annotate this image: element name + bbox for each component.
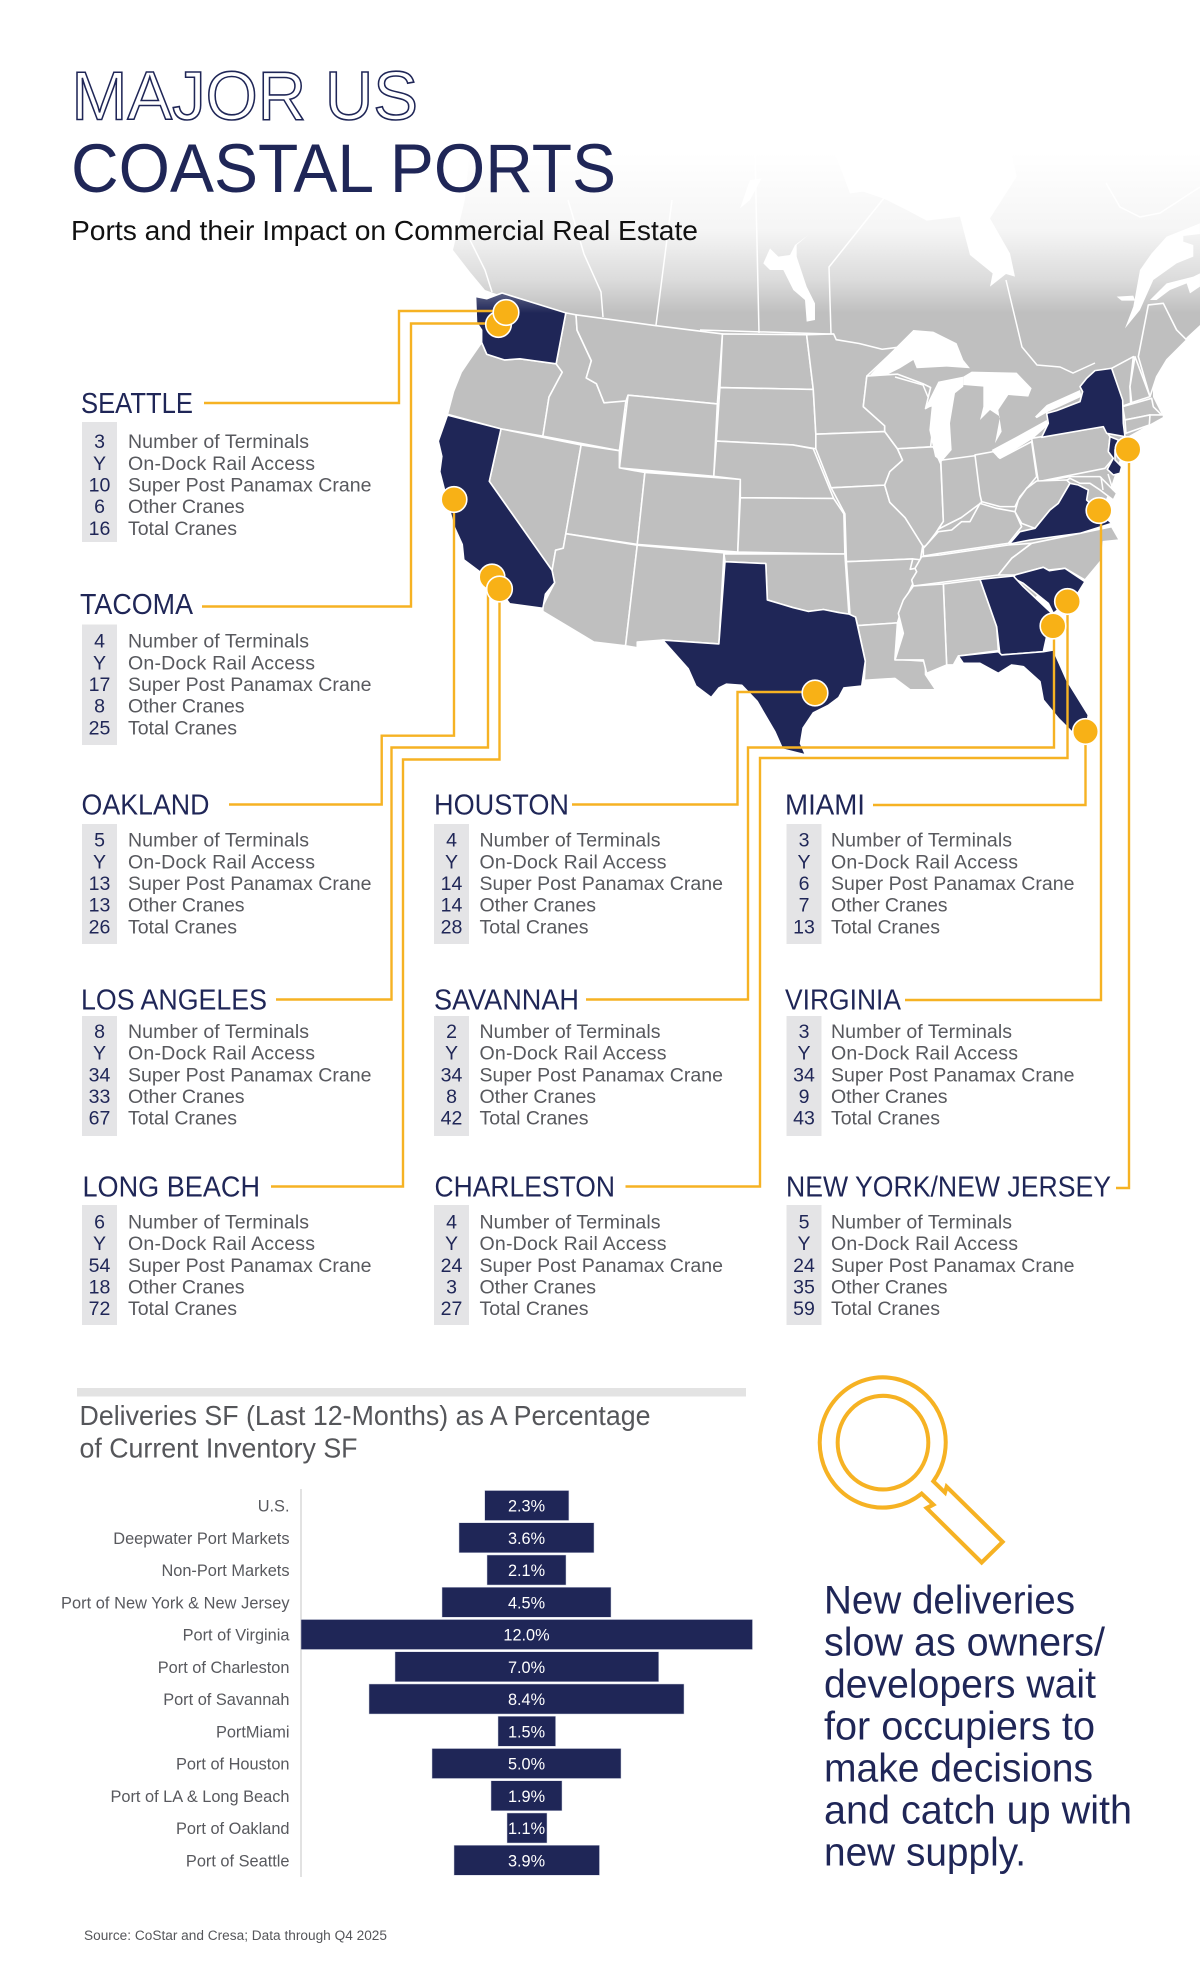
- table: Charleston: Other Cranes: [480, 1276, 596, 1298]
- table: Miami: 3: [799, 830, 809, 852]
- table: Oakland: On-Dock Rail Access: [128, 851, 315, 873]
- table: Miami: Number of Terminals: [831, 830, 1012, 852]
- state: California: [438, 415, 555, 608]
- title line: MAJOR US: MAJOR US: [72, 58, 418, 134]
- table: New York / New Jersey: Other Cranes: [831, 1276, 948, 1298]
- table: Miami: [786, 824, 1074, 944]
- map: Canada and base land: [453, 150, 1200, 640]
- bar chart: 1.5%: [508, 1723, 545, 1741]
- pin: Virginia: [1086, 498, 1112, 523]
- table: Houston: Total Cranes: [480, 916, 589, 938]
- table: Charleston: 24: [441, 1255, 462, 1277]
- table: Savannah: Super Post Panamax Crane: [480, 1064, 723, 1086]
- table: Miami: Total Cranes: [831, 916, 940, 938]
- title line: COASTAL PORTS: COASTAL PORTS: [71, 130, 616, 207]
- table: Savannah: On-Dock Rail Access: [480, 1043, 667, 1065]
- table: Long Beach: 6: [94, 1212, 105, 1234]
- table: New York / New Jersey: 59: [793, 1298, 815, 1320]
- table: Tacoma: 8: [94, 696, 105, 718]
- table: Houston: 14: [441, 873, 462, 895]
- bar chart: 2.3%: [508, 1498, 545, 1516]
- table: Savannah: [434, 1016, 723, 1136]
- map: northeastern states: [975, 303, 1187, 507]
- table: Virginia: 3: [799, 1021, 809, 1043]
- table: Charleston: [434, 1205, 723, 1325]
- subtitle: Ports and their Impact on Commercial Real Estate: [71, 215, 698, 246]
- table: Long Beach: 18: [89, 1276, 110, 1298]
- table: Virginia: Other Cranes: [831, 1086, 948, 1108]
- table: Tacoma: 17: [89, 674, 110, 696]
- table: Tacoma: Y: [93, 652, 106, 674]
- pin: New York / New Jersey: [1115, 437, 1141, 462]
- table: Virginia: Total Cranes: [831, 1108, 940, 1130]
- panel: Seattle: [81, 388, 372, 542]
- leader line: Seattle: [204, 311, 500, 403]
- table: Oakland: [82, 824, 372, 944]
- pin: Miami: [1073, 719, 1098, 744]
- heading: Virginia: VIRGINIA: [785, 984, 902, 1016]
- table: Long Beach: Number of Terminals: [128, 1212, 309, 1234]
- table: Virginia: Super Post Panamax Crane: [831, 1064, 1074, 1086]
- bar chart: U.S.: [258, 1498, 290, 1516]
- bar chart: 1.1%: [508, 1820, 545, 1838]
- table: Long Beach: On-Dock Rail Access: [128, 1233, 315, 1255]
- table: Virginia: 34: [793, 1064, 815, 1086]
- callout: new deliveries text: for occupiers to: [824, 1704, 1095, 1748]
- table: Miami: Y: [797, 851, 811, 873]
- table: Tacoma: On-Dock Rail Access: [128, 652, 315, 674]
- table: Houston: 14: [441, 895, 462, 917]
- table: Houston: Other Cranes: [480, 895, 596, 917]
- pin: Tacoma: [486, 312, 511, 337]
- callout: new deliveries text: New deliveries: [824, 1578, 1075, 1622]
- callout: new deliveries text: developers wait: [824, 1662, 1096, 1706]
- table: Miami: 13: [793, 916, 815, 938]
- table: Oakland: 26: [89, 916, 110, 938]
- table: New York / New Jersey: On-Dock Rail Access: [831, 1233, 1018, 1255]
- source note: Source: CoStar and Cresa; Data through Q4 2025: [84, 1928, 387, 1943]
- table: Los Angeles: On-Dock Rail Access: [128, 1043, 315, 1065]
- leader line: Tacoma: [202, 324, 498, 606]
- table: Tacoma: Super Post Panamax Crane: [128, 674, 372, 696]
- table: Los Angeles: 34: [89, 1064, 110, 1086]
- table: Seattle: [82, 422, 372, 542]
- table: Tacoma: Total Cranes: [128, 717, 237, 739]
- callout: new deliveries text: [824, 1578, 1132, 1874]
- table: Houston: 4: [446, 830, 457, 852]
- leader line: New York / New Jersey: [1116, 449, 1129, 1188]
- bar chart: 4.5%: [508, 1594, 545, 1612]
- bar chart: Port of Houston: [176, 1756, 290, 1774]
- table: Virginia: 9: [799, 1086, 809, 1108]
- table: Tacoma: 4: [94, 631, 105, 653]
- table: Virginia: On-Dock Rail Access: [831, 1043, 1018, 1065]
- table: Tacoma: 25: [89, 717, 110, 739]
- bar chart: 7.0%: [508, 1659, 545, 1677]
- bar chart: 2.1%: [508, 1562, 545, 1580]
- heading: New York / New Jersey: NEW YORK/NEW JERSEY: [786, 1172, 1111, 1204]
- heading: Tacoma: TACOMA: [80, 589, 194, 621]
- table: New York / New Jersey: Super Post Panamax Crane: [831, 1255, 1074, 1277]
- leader line: Houston: [572, 692, 815, 804]
- table: Seattle: Number of Terminals: [128, 431, 309, 453]
- table: New York / New Jersey: Total Cranes: [831, 1298, 940, 1320]
- bar chart: Non-Port Markets: [161, 1562, 290, 1580]
- heading: Houston: HOUSTON: [434, 790, 569, 822]
- table: Houston: 28: [441, 916, 462, 938]
- heading: Savannah: SAVANNAH: [434, 984, 579, 1016]
- table: Los Angeles: 8: [94, 1021, 105, 1043]
- panel: Houston: [434, 790, 723, 944]
- table: Charleston: 27: [441, 1298, 462, 1320]
- map: southeastern states: [895, 480, 1119, 673]
- table: Miami: 7: [799, 895, 809, 917]
- table: Seattle: 10: [89, 474, 110, 496]
- panel: New York / New Jersey: [786, 1172, 1111, 1325]
- table: Virginia: [786, 1016, 1074, 1136]
- state: New Jersey: [1107, 437, 1122, 475]
- table: Los Angeles: 67: [89, 1108, 110, 1130]
- table: Savannah: 8: [446, 1086, 457, 1108]
- state: Florida: [958, 650, 1088, 732]
- pin: Savannah: [1040, 613, 1066, 639]
- table: Tacoma: Number of Terminals: [128, 631, 309, 653]
- table: Tacoma: Other Cranes: [128, 696, 245, 718]
- bar chart: 1.9%: [508, 1788, 545, 1806]
- leader line: Miami: [873, 731, 1086, 805]
- table: Seattle: 3: [94, 431, 105, 453]
- table: Oakland: Other Cranes: [128, 895, 245, 917]
- leader line: Los Angeles: [276, 577, 488, 1000]
- panel: deliveries chart: [61, 1388, 752, 1877]
- callout: new deliveries text: slow as owners/: [824, 1620, 1106, 1664]
- chart top rule: [77, 1388, 746, 1396]
- table: Seattle: 6: [94, 496, 105, 518]
- state: Washington: [476, 293, 566, 364]
- heading: Los Angeles: LOS ANGELES: [81, 984, 267, 1016]
- table: Tacoma: [82, 624, 372, 745]
- bar chart: PortMiami: [216, 1723, 290, 1741]
- table: Charleston: 3: [446, 1276, 457, 1298]
- heading: Seattle: SEATTLE: [81, 388, 193, 420]
- bar chart: [61, 1489, 752, 1877]
- pin: Seattle: [493, 300, 519, 325]
- bar chart: 3.9%: [508, 1852, 545, 1870]
- table: Miami: On-Dock Rail Access: [831, 851, 1018, 873]
- map: North America with highlighted port states: [438, 130, 1200, 755]
- panel: Charleston: [434, 1172, 723, 1325]
- chart title: Deliveries SF (Last 12-Months) as A Percentage: [80, 1400, 650, 1431]
- leader line: Charleston: [626, 602, 1068, 1186]
- table: Savannah: 34: [441, 1064, 462, 1086]
- table: Los Angeles: Y: [93, 1043, 106, 1065]
- table: Long Beach: Y: [93, 1233, 106, 1255]
- table: New York / New Jersey: [786, 1205, 1074, 1325]
- table: Miami: 6: [799, 873, 809, 895]
- table: Houston: Number of Terminals: [480, 830, 661, 852]
- table: Savannah: Number of Terminals: [480, 1021, 661, 1043]
- bar chart: 12.0%: [503, 1627, 550, 1645]
- table: New York / New Jersey: 24: [793, 1255, 815, 1277]
- state: New York: [1042, 368, 1125, 437]
- table: Oakland: Number of Terminals: [128, 830, 309, 852]
- heading: Charleston: CHARLESTON: [434, 1172, 615, 1204]
- table: Seattle: Y: [93, 453, 106, 475]
- map: western and central states: [447, 313, 982, 690]
- table: Charleston: Number of Terminals: [480, 1212, 661, 1234]
- bar chart: Port of New York & New Jersey: [61, 1594, 290, 1612]
- table: Virginia: Number of Terminals: [831, 1021, 1012, 1043]
- panel: Oakland: [82, 790, 372, 944]
- table: Houston: Super Post Panamax Crane: [480, 873, 723, 895]
- panel: Long Beach: [82, 1172, 372, 1325]
- bar chart: Port of Seattle: [186, 1852, 290, 1870]
- pin: Long Beach: [487, 576, 512, 602]
- table: Seattle: On-Dock Rail Access: [128, 453, 315, 475]
- pin: Houston: [802, 680, 828, 706]
- callout: new deliveries text: and catch up with: [824, 1788, 1132, 1832]
- bar chart: Deepwater Port Markets: [113, 1530, 290, 1548]
- table: Houston: On-Dock Rail Access: [480, 851, 667, 873]
- state: Virginia: [1009, 483, 1112, 544]
- pin: Oakland: [441, 487, 467, 512]
- table: Long Beach: Other Cranes: [128, 1276, 245, 1298]
- panel: Tacoma: [80, 589, 372, 745]
- heading: Oakland: OAKLAND: [82, 790, 210, 822]
- bar chart: 8.4%: [508, 1691, 545, 1709]
- table: Los Angeles: [82, 1016, 372, 1136]
- table: Houston: Y: [445, 851, 458, 873]
- callout: new deliveries text: new supply.: [824, 1830, 1026, 1874]
- leader line: Oakland: [229, 500, 454, 804]
- leader line: Virginia: [905, 510, 1101, 1000]
- map: Great Lakes and bays: [823, 130, 1200, 462]
- bar chart: Port of Oakland: [176, 1820, 290, 1838]
- table: Long Beach: [82, 1205, 372, 1325]
- table: Virginia: Y: [797, 1043, 811, 1065]
- table: Seattle: Other Cranes: [128, 496, 245, 518]
- state: Georgia: [980, 576, 1052, 655]
- table: Long Beach: Super Post Panamax Crane: [128, 1255, 372, 1277]
- table: Los Angeles: Super Post Panamax Crane: [128, 1064, 372, 1086]
- bar chart: 5.0%: [508, 1756, 545, 1774]
- table: Los Angeles: Other Cranes: [128, 1086, 245, 1108]
- map: province and border lines: [470, 153, 1200, 490]
- table: Charleston: On-Dock Rail Access: [480, 1233, 667, 1255]
- table: New York / New Jersey: Number of Terminals: [831, 1212, 1012, 1234]
- bar chart: Port of Charleston: [158, 1659, 290, 1677]
- leader line: Savannah: [586, 626, 1054, 1000]
- state: Texas: [663, 562, 865, 755]
- table: Miami: Super Post Panamax Crane: [831, 873, 1074, 895]
- chart title: [80, 1400, 650, 1464]
- table: Savannah: Y: [445, 1043, 458, 1065]
- table: Long Beach: Total Cranes: [128, 1298, 237, 1320]
- panel: Savannah: [434, 984, 723, 1136]
- pin: Charleston: [1055, 589, 1080, 614]
- table: Charleston: Total Cranes: [480, 1298, 589, 1320]
- table: Savannah: Total Cranes: [480, 1108, 589, 1130]
- table: Seattle: 16: [89, 518, 110, 540]
- panel: Miami: [785, 790, 1074, 944]
- table: Oakland: 13: [89, 873, 110, 895]
- map: fade to white at the top: [440, 150, 1200, 313]
- heading: Miami: MIAMI: [785, 790, 865, 822]
- chart title: of Current Inventory SF: [80, 1432, 358, 1464]
- table: Houston: [434, 824, 723, 944]
- heading: Long Beach: LONG BEACH: [82, 1172, 260, 1204]
- table: Oakland: Y: [93, 851, 106, 873]
- table: Savannah: 2: [446, 1021, 457, 1043]
- map: highlighted states in navy: [438, 293, 1125, 755]
- leader line: Long Beach: [271, 589, 500, 1186]
- table: Seattle: Total Cranes: [128, 518, 237, 540]
- table: Miami: Other Cranes: [831, 895, 948, 917]
- table: Long Beach: 54: [89, 1255, 110, 1277]
- table: Los Angeles: Total Cranes: [128, 1108, 237, 1130]
- table: Charleston: 4: [446, 1212, 457, 1234]
- bar chart: Port of LA & Long Beach: [110, 1788, 290, 1806]
- table: New York / New Jersey: Y: [797, 1233, 811, 1255]
- table: Los Angeles: 33: [89, 1086, 110, 1108]
- panel: Virginia: [785, 984, 1074, 1136]
- table: Seattle: Super Post Panamax Crane: [128, 474, 372, 496]
- table: Oakland: Super Post Panamax Crane: [128, 873, 372, 895]
- bar chart: Port of Savannah: [163, 1691, 290, 1709]
- map: Lake Winnipeg: [740, 178, 815, 322]
- callout: new deliveries text: make decisions: [824, 1746, 1093, 1790]
- icon: magnifying glass: [820, 1377, 1003, 1563]
- bar chart: Port of Virginia: [183, 1627, 290, 1645]
- table: Savannah: Other Cranes: [480, 1086, 596, 1108]
- bar chart: 3.6%: [508, 1530, 545, 1548]
- table: New York / New Jersey: 35: [793, 1276, 815, 1298]
- table: Charleston: Super Post Panamax Crane: [480, 1255, 723, 1277]
- table: Virginia: 43: [793, 1108, 815, 1130]
- map pins: [441, 300, 1141, 744]
- table: Oakland: 13: [89, 895, 110, 917]
- panel: Los Angeles: [81, 984, 372, 1136]
- table: New York / New Jersey: 5: [799, 1212, 810, 1234]
- pin: Los Angeles: [479, 564, 505, 590]
- table: Oakland: Total Cranes: [128, 916, 237, 938]
- title: [71, 58, 698, 246]
- table: Savannah: 42: [441, 1108, 462, 1130]
- state: South Carolina: [1013, 567, 1085, 613]
- table: Oakland: 5: [94, 830, 105, 852]
- table: Charleston: Y: [445, 1233, 458, 1255]
- table: Los Angeles: Number of Terminals: [128, 1021, 309, 1043]
- table: Long Beach: 72: [89, 1298, 110, 1320]
